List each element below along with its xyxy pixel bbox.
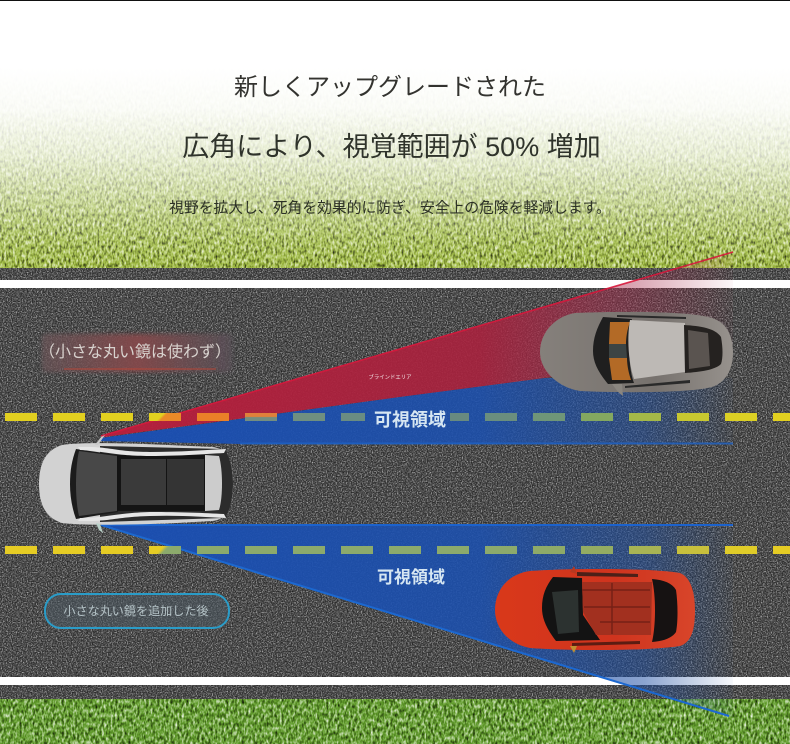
lane dashes: lower bbox=[5, 546, 790, 554]
road edge line: top bbox=[0, 280, 790, 288]
road: asphalt background bbox=[0, 268, 790, 699]
car: grey coupe (upper lane) bbox=[540, 312, 733, 396]
title: main headline: 広角により、視覚範囲が 50% 増加 bbox=[182, 132, 601, 162]
road edge line: bottom bbox=[0, 677, 790, 685]
lower visible zone: blue wedge bbox=[101, 524, 733, 718]
car: red sports car (lower lane) bbox=[495, 566, 695, 653]
label: after adding small round mirror bbox=[45, 594, 229, 628]
grass strip: bottom bbox=[0, 699, 790, 744]
blind zone: red wedge bbox=[101, 252, 733, 437]
background: grass fading into white bbox=[0, 40, 790, 269]
label: upper visible area: 可視領域 bbox=[374, 410, 446, 430]
lane dashes: upper bbox=[5, 413, 790, 421]
title: first line: 新しくアップグレードされた bbox=[234, 74, 546, 101]
subtitle: description: 視野を拡大し、死角を効果的に防ぎ、安全上の危険を軽減します。 bbox=[169, 200, 611, 216]
label: blind area: ブラインドエリア bbox=[368, 373, 412, 381]
label: lower visible area: 可視領域 bbox=[377, 568, 445, 587]
car: white hatchback (ego vehicle) bbox=[39, 435, 233, 533]
top edge line bbox=[0, 0, 790, 1]
upper visible zone: blue wedge bbox=[101, 378, 733, 444]
label: without small round mirror bbox=[39, 334, 232, 372]
label: after adding small round mirror: 小さな丸い鏡を追加した後 bbox=[63, 603, 209, 618]
label: without small round mirror: （小さな丸い鏡は使わず） bbox=[39, 343, 231, 361]
